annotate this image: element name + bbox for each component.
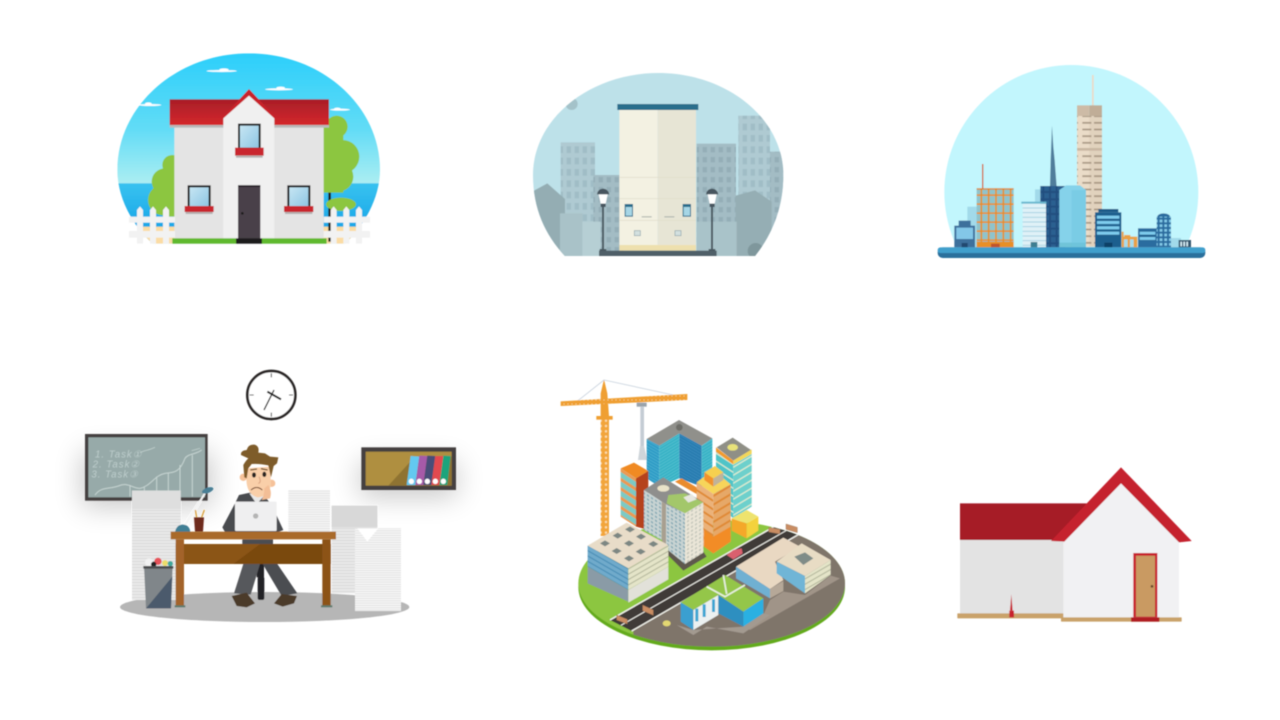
- illustration: isometric city block with crane: [561, 379, 850, 657]
- left fence: [129, 206, 175, 244]
- door: [1131, 553, 1159, 622]
- backdrop circle: [532, 72, 784, 257]
- paved area and road: [609, 526, 846, 648]
- road barriers: [617, 524, 797, 624]
- pavement: [599, 251, 717, 256]
- cyan glass tower: [1059, 185, 1086, 247]
- left tree: [148, 155, 182, 217]
- illustration: simple house with red roof and door: [957, 467, 1192, 622]
- yellow-orange tower: [697, 466, 731, 553]
- paper stack: centre: [288, 490, 330, 533]
- spire: [1050, 126, 1057, 187]
- yellow low block: [732, 510, 758, 538]
- task list: [91, 450, 143, 480]
- trash bin: [143, 558, 173, 608]
- hair: [241, 445, 278, 478]
- grass strip: [172, 238, 327, 244]
- low office block: [588, 523, 668, 603]
- skyline near buildings: [533, 183, 772, 259]
- courtyard building: [777, 543, 831, 593]
- worker: [222, 445, 297, 607]
- floor shadow: [120, 592, 409, 622]
- small blue building left: [954, 221, 975, 247]
- task list: 3. Task③: [91, 469, 139, 480]
- orange strip between towers: [675, 478, 698, 495]
- board and shelf wall shadows: [82, 452, 457, 507]
- car: [727, 548, 743, 559]
- lower right window: [284, 185, 313, 214]
- pale striped tower: [1021, 202, 1046, 247]
- gable: [223, 89, 275, 238]
- skyline far buildings: [561, 116, 790, 259]
- torso: [222, 493, 283, 532]
- wall clock: [247, 371, 295, 419]
- chair post: [257, 564, 264, 600]
- clouds: [139, 68, 350, 111]
- pad under green-roof building: [677, 613, 770, 635]
- blue building right: [1138, 213, 1171, 247]
- illustration: stressed office worker at desk: [82, 371, 457, 622]
- foundation left: [957, 613, 1063, 618]
- small yellow vehicle: [663, 620, 671, 626]
- legs: [234, 564, 260, 595]
- light blue back block: [1035, 189, 1042, 203]
- left street lamp: [597, 189, 609, 251]
- disc rim: [578, 524, 845, 650]
- door: [236, 185, 262, 244]
- illustration: apartment tower with city backdrop and street lamps: [532, 72, 784, 257]
- head: [240, 445, 278, 500]
- foundation right: [1061, 617, 1182, 622]
- lower left window: [185, 185, 214, 214]
- side wing wall: [960, 540, 1064, 614]
- chalk growth chart: [95, 447, 202, 497]
- skylights: [600, 526, 658, 561]
- roof: [170, 99, 329, 125]
- right street lamp: [706, 189, 718, 251]
- right teal tower: [716, 438, 752, 518]
- side wing roof: [960, 503, 1087, 540]
- task list: 2. Task②: [92, 460, 140, 471]
- teal banded building: [1095, 209, 1121, 247]
- binders: [407, 456, 451, 485]
- right tree: [323, 116, 359, 242]
- desk lamp: [175, 486, 214, 532]
- crane: [561, 379, 687, 536]
- laptop: [235, 502, 277, 531]
- paper stack: right back: [332, 506, 377, 593]
- small orange block: [1122, 232, 1137, 247]
- pale block behind orange tower: [967, 207, 977, 247]
- sky circle: [944, 64, 1199, 248]
- teal high-rise: [647, 420, 712, 487]
- orange tower: [977, 164, 1014, 247]
- long beige building: [736, 538, 800, 598]
- desk: [171, 532, 336, 607]
- paper stack: right front: [355, 528, 401, 611]
- rust and orange tower: [621, 463, 648, 530]
- upper window: [235, 124, 264, 158]
- task list: 1. Task①: [95, 450, 143, 461]
- tall beige tower: [1077, 75, 1102, 247]
- illustration: two-storey house with red roof: [110, 45, 387, 247]
- grey mid-rise: [644, 477, 707, 571]
- house body: [174, 125, 324, 238]
- small red marker: [1009, 594, 1014, 617]
- paper stack: left: [132, 491, 181, 600]
- chalkboard: [85, 434, 208, 501]
- ground platform: [938, 247, 1205, 258]
- bookshelf: [361, 447, 456, 490]
- right fence: [324, 206, 370, 244]
- grass disc: [578, 520, 845, 647]
- low block far right: [1171, 238, 1191, 247]
- concrete pad: [743, 576, 840, 630]
- sky and sea circle: [110, 45, 387, 247]
- main tower: [617, 104, 698, 251]
- navy tower: [1040, 186, 1065, 247]
- illustration: city skyline on blue base: [936, 64, 1206, 259]
- tower windows: [625, 204, 691, 236]
- cup with pencils: [194, 510, 204, 532]
- gable roof: [1051, 467, 1192, 542]
- green-roof building: [681, 575, 763, 630]
- front wall: [1063, 483, 1179, 617]
- shoes: [232, 593, 255, 607]
